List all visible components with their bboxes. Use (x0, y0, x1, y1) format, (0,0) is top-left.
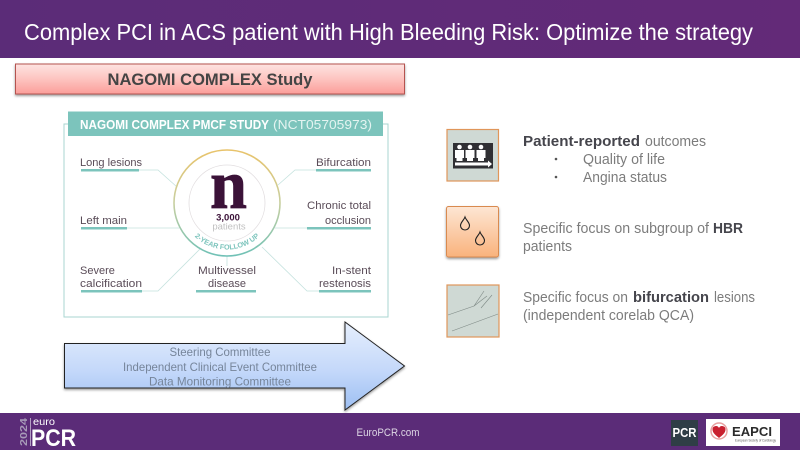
patient count circle (173, 147, 281, 257)
text: HBR subgroup: HBR (713, 220, 743, 237)
PCR logo: PCR (672, 425, 697, 440)
text: patient-reported outcomes: Angina status (583, 169, 667, 186)
study title box (16, 64, 404, 94)
EAPCI logo: European Society of Cardiology (735, 438, 776, 442)
study lesion labels (80, 157, 372, 290)
arrow: committees: Data Monitoring Committee (149, 374, 291, 388)
text: patient-reported outcomes: outcomes (645, 133, 706, 150)
patient count circle: 3,000 (216, 212, 240, 224)
study lesion labels: Bifurcation (316, 157, 371, 169)
text: bifurcation lesions: lesions (714, 289, 755, 306)
website: EuroPCR.com (356, 427, 420, 439)
study lesion labels: disease (208, 278, 246, 290)
EAPCI logo: EAPCI (732, 425, 772, 439)
icon: bifurcation angiogram (447, 285, 499, 337)
study lesion labels: restenosis (319, 278, 372, 290)
text: patient-reported outcomes: Patient-reported (523, 133, 640, 150)
EAPCI logo (706, 419, 780, 446)
text: HBR subgroup: Specific focus on subgroup of (523, 220, 710, 237)
text: bifurcation lesions: (independent corelab QCA) (523, 307, 694, 324)
study lesion labels: Chronic total (307, 200, 371, 212)
panel: PMCF study design (64, 112, 388, 318)
icon: blood drops (446, 206, 498, 257)
text: bifurcation lesions (523, 289, 755, 324)
text: bifurcation lesions: Specific focus on (523, 289, 628, 306)
text: HBR subgroup: patients (523, 238, 572, 255)
arrow: committees: Independent Clinical Event Committee (123, 360, 317, 374)
study lesion labels: calcification (80, 278, 142, 290)
EuroPCR 2024 logo: 2024 (18, 418, 30, 446)
EuroPCR 2024 logo (18, 417, 76, 450)
study title box: NAGOMI COMPLEX Study (108, 70, 313, 89)
study lesion labels: occlusion (325, 215, 371, 227)
panel header band: (NCT05705973) (273, 117, 372, 132)
slide title: Complex PCI in ACS patient with High Bleeding Risk: Optimize the strategy (24, 19, 753, 45)
patient count circle: patients (212, 222, 246, 232)
icon: patients (447, 130, 498, 181)
PCR logo (671, 420, 698, 446)
study lesion labels: Long lesions (80, 157, 142, 169)
arrow: committees (64, 322, 404, 410)
study lesion labels: Left main (80, 215, 127, 227)
patient count circle: n (210, 147, 247, 224)
footer bar (0, 413, 800, 450)
study lesion labels: Multivessel (198, 265, 256, 277)
study lesion labels: In-stent (332, 265, 371, 277)
arrow: committees: Steering Committee (170, 345, 271, 359)
patient count circle: 2-YEAR FOLLOW UP (194, 234, 258, 250)
text: HBR subgroup (523, 220, 743, 255)
text: bifurcation lesions: bifurcation (633, 289, 709, 306)
EuroPCR 2024 logo: euro (33, 417, 55, 428)
panel header band: NAGOMI COMPLEX PMCF STUDY (80, 117, 269, 132)
study lesion labels: Severe (80, 265, 115, 277)
text: patient-reported outcomes (523, 133, 706, 186)
panel header band (68, 112, 383, 136)
header bar (0, 0, 800, 58)
text: patient-reported outcomes: Quality of life (583, 151, 665, 168)
